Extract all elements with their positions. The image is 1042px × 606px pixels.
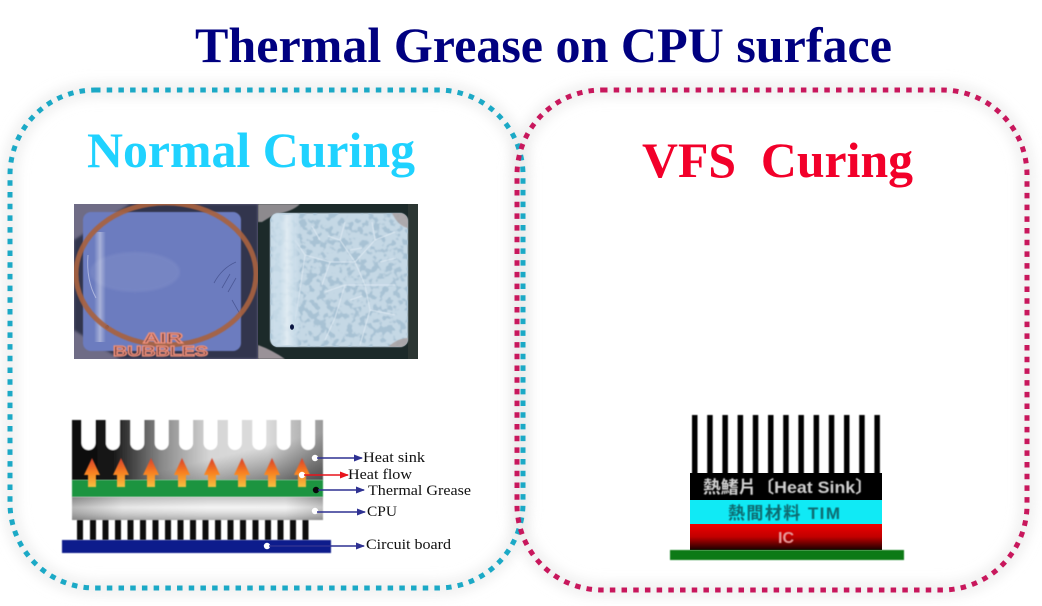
- arrow: heat flow: [304, 474, 348, 476]
- label: heat flow: Heat flow: [348, 467, 413, 483]
- label: thermal grease: Thermal Grease: [368, 483, 471, 499]
- panel: VFS curing: [517, 90, 1027, 590]
- circuit board: [62, 540, 331, 553]
- IC layer: IC: [778, 530, 794, 547]
- heading: normal curing: Normal Curing: [87, 122, 415, 178]
- thermal grease layer: [72, 480, 323, 497]
- heat sink block: [690, 473, 882, 500]
- CPU layer: [72, 497, 323, 520]
- TIM layer: [690, 500, 882, 524]
- label: CPU: CPU: [367, 504, 398, 520]
- arrow: thermal grease: [318, 489, 364, 491]
- title: Thermal Grease on CPU surface: [195, 17, 892, 73]
- air bubbles caption: [112, 332, 209, 358]
- IC layer: [690, 524, 882, 550]
- panel: normal curing: [10, 90, 523, 588]
- arrow: CPU: [317, 511, 365, 513]
- TIM layer: 熱間材料 TIM: [728, 504, 840, 523]
- arrow: circuit board: [269, 545, 364, 547]
- board: [670, 550, 904, 560]
- label: heat sink: Heat sink: [363, 450, 426, 466]
- label: circuit board: Circuit board: [366, 537, 452, 553]
- heat sink: [72, 420, 323, 480]
- photo: CPU with grease dendrites: [258, 204, 418, 359]
- heading: VFS curing: VFS Curing: [642, 132, 913, 188]
- heat sink fins: [692, 415, 880, 475]
- heat sink block: 熱鰭片〔Heat Sink〕: [703, 478, 873, 497]
- diagram: thermal grease stack: [62, 420, 471, 553]
- arrow: heat sink: [317, 457, 362, 459]
- air bubbles caption: AIR: [143, 330, 183, 347]
- air bubbles caption: BUBBLES: [113, 343, 208, 360]
- CPU pins: [77, 520, 308, 540]
- dendrite pattern: [270, 213, 408, 347]
- callout dots: [264, 455, 319, 549]
- diagram: VFS TIM stack: [670, 415, 904, 560]
- heat flow arrows: [84, 458, 310, 487]
- photo: CPU with air bubbles: [74, 203, 258, 360]
